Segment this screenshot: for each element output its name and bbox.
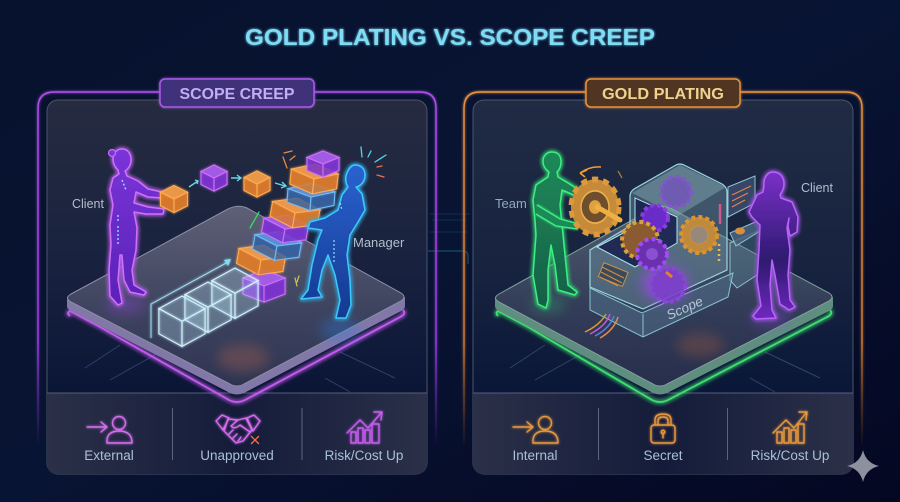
stat: risk and cost up bbox=[751, 412, 829, 463]
stat: internal bbox=[512, 416, 558, 463]
transparent scope machine bbox=[585, 164, 733, 338]
label: client: Client bbox=[72, 197, 104, 211]
icon: arrow to person bbox=[87, 416, 132, 443]
stat: unapproved bbox=[200, 415, 274, 463]
flying scope cubes bbox=[160, 165, 270, 212]
icon: red x mark bbox=[251, 436, 259, 444]
glass card: scope creep bbox=[47, 100, 427, 474]
figure: manager bbox=[301, 165, 365, 318]
glass cubes: approved scope bbox=[151, 259, 258, 346]
stat: secret bbox=[643, 414, 683, 463]
caption: unapproved: Unapproved bbox=[200, 448, 274, 463]
glass card: gold plating bbox=[473, 100, 853, 474]
circuit traces between panels bbox=[428, 214, 470, 264]
glass platform: scope creep bbox=[67, 206, 405, 394]
label: team: Team bbox=[495, 196, 527, 211]
panel: scope creep bbox=[38, 92, 436, 474]
machine front details bbox=[598, 204, 720, 286]
badge: gold plating bbox=[586, 79, 740, 107]
strain marks bbox=[250, 147, 386, 286]
caption: risk and cost up: Risk/Cost Up bbox=[325, 448, 403, 463]
floor light streaks: gold plating bbox=[510, 345, 820, 392]
machine base with scope label: Scope bbox=[664, 293, 705, 323]
icon: arrow to person bbox=[513, 416, 558, 443]
neon platform outline: scope creep bbox=[68, 310, 404, 402]
small arrows between cubes bbox=[189, 175, 286, 188]
sparkle watermark bbox=[847, 450, 879, 482]
purple machine glow bbox=[641, 266, 689, 302]
stats strip: gold plating bbox=[473, 393, 853, 474]
stat: risk and cost up bbox=[325, 412, 403, 463]
neon platform outline: gold plating bbox=[496, 310, 831, 402]
neon outer frame: gold plating bbox=[464, 92, 862, 445]
badge: gold plating: GOLD PLATING bbox=[602, 86, 724, 103]
back console with screens bbox=[728, 176, 768, 288]
glass platform: gold plating bbox=[495, 206, 833, 394]
neon outer frame: scope creep bbox=[38, 92, 436, 445]
gold gears inside machine bbox=[622, 217, 717, 269]
label: client (gold plating): Client bbox=[801, 181, 833, 195]
icon: rising chart bbox=[347, 412, 382, 443]
gear cavity bbox=[597, 198, 677, 267]
title: GOLD PLATING VS. SCOPE CREEP bbox=[245, 24, 655, 50]
gold gear being added bbox=[571, 167, 622, 235]
caption: risk and cost up: Risk/Cost Up bbox=[751, 448, 829, 463]
figure: team bbox=[533, 152, 579, 308]
icon: padlock bbox=[651, 414, 675, 443]
badge: scope creep: SCOPE CREEP bbox=[180, 86, 295, 103]
icon: rising chart bbox=[773, 412, 807, 443]
label: manager: Manager bbox=[353, 235, 405, 250]
icon: handshake with x bbox=[216, 415, 260, 443]
teetering block stack bbox=[235, 151, 339, 302]
stats strip: scope creep bbox=[47, 393, 427, 474]
floor light streaks: scope creep bbox=[85, 345, 395, 392]
multicolour cables bbox=[585, 314, 618, 338]
figure: client (gold plating) bbox=[749, 172, 798, 319]
caption: internal: Internal bbox=[512, 448, 558, 463]
machine base with scope label bbox=[590, 273, 733, 337]
panel: gold plating bbox=[464, 92, 862, 474]
caption: secret: Secret bbox=[643, 448, 683, 463]
purple background gears bbox=[642, 177, 691, 302]
machine housing bbox=[590, 164, 727, 309]
caption: external: External bbox=[84, 448, 134, 463]
badge: scope creep bbox=[160, 79, 314, 107]
stat: external bbox=[84, 416, 134, 463]
figure: client bbox=[108, 149, 164, 305]
